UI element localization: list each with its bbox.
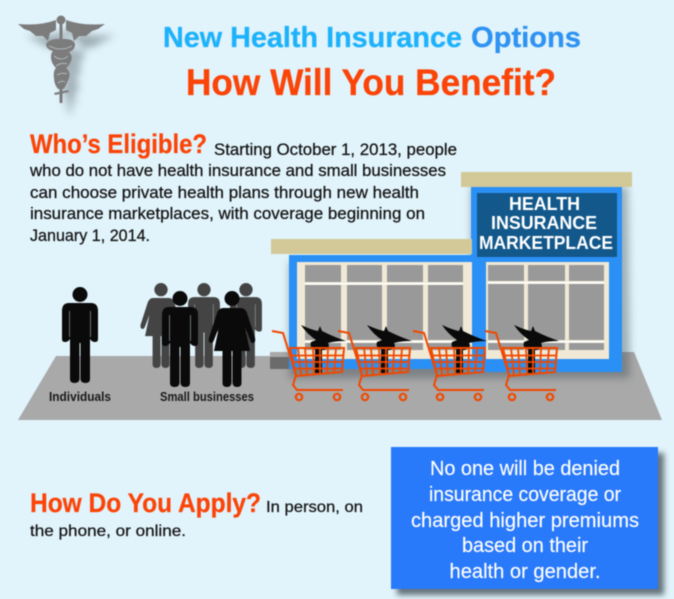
upper roof [461, 172, 632, 187]
text block: how do you apply [30, 488, 363, 540]
people: small businesses: Small businesses [160, 389, 254, 404]
callout: no one will be denied: health or gender. [450, 561, 600, 583]
text block: who's eligible: insurance marketplaces, with coverage beginning on [30, 205, 425, 223]
text block: who's eligible: who do not have health insurance and small businesses [29, 162, 446, 180]
title: New Health Insurance [163, 22, 462, 54]
right window [486, 262, 609, 359]
ground [18, 352, 662, 420]
text block: how do you apply: How Do You Apply? [30, 488, 261, 518]
building [270, 172, 632, 378]
text block: who's eligible: can choose private health plans through new health [30, 184, 419, 202]
text block: who's eligible [29, 129, 457, 245]
tall wall [471, 187, 622, 372]
lower roof [271, 239, 472, 254]
callout: no one will be denied: No one will be denied [430, 458, 620, 480]
text block: who's eligible: January 1, 2014. [30, 227, 150, 245]
text block: who's eligible: Who’s Eligible? [30, 129, 207, 159]
sidewalk band [270, 357, 300, 369]
marketplace sign [477, 193, 617, 257]
marketplace sign: HEALTH [509, 194, 580, 214]
callout: no one will be denied: insurance coverage or [429, 484, 621, 506]
building shadow [289, 187, 630, 378]
people: individual: Individuals [49, 389, 111, 404]
callout: no one will be denied [391, 447, 664, 595]
people: small businesses [140, 283, 262, 404]
shopping carts [272, 325, 559, 400]
left window [297, 262, 472, 359]
text block: how do you apply: In person, on [266, 499, 363, 516]
title: Options [471, 22, 581, 54]
lower wall [289, 255, 479, 369]
marketplace sign: INSURANCE [491, 213, 597, 233]
marketplace sign: MARKETPLACE [479, 233, 613, 253]
callout: no one will be denied: charged higher premiums [411, 510, 639, 532]
title [163, 22, 581, 103]
icon: caduceus [18, 16, 114, 114]
text block: who's eligible: Starting October 1, 2013, people [214, 141, 457, 159]
people: individual [49, 287, 111, 404]
text block: how do you apply: the phone, or online. [30, 523, 186, 540]
callout: no one will be denied: based on their [462, 535, 588, 557]
title: How Will You Benefit? [186, 61, 556, 103]
